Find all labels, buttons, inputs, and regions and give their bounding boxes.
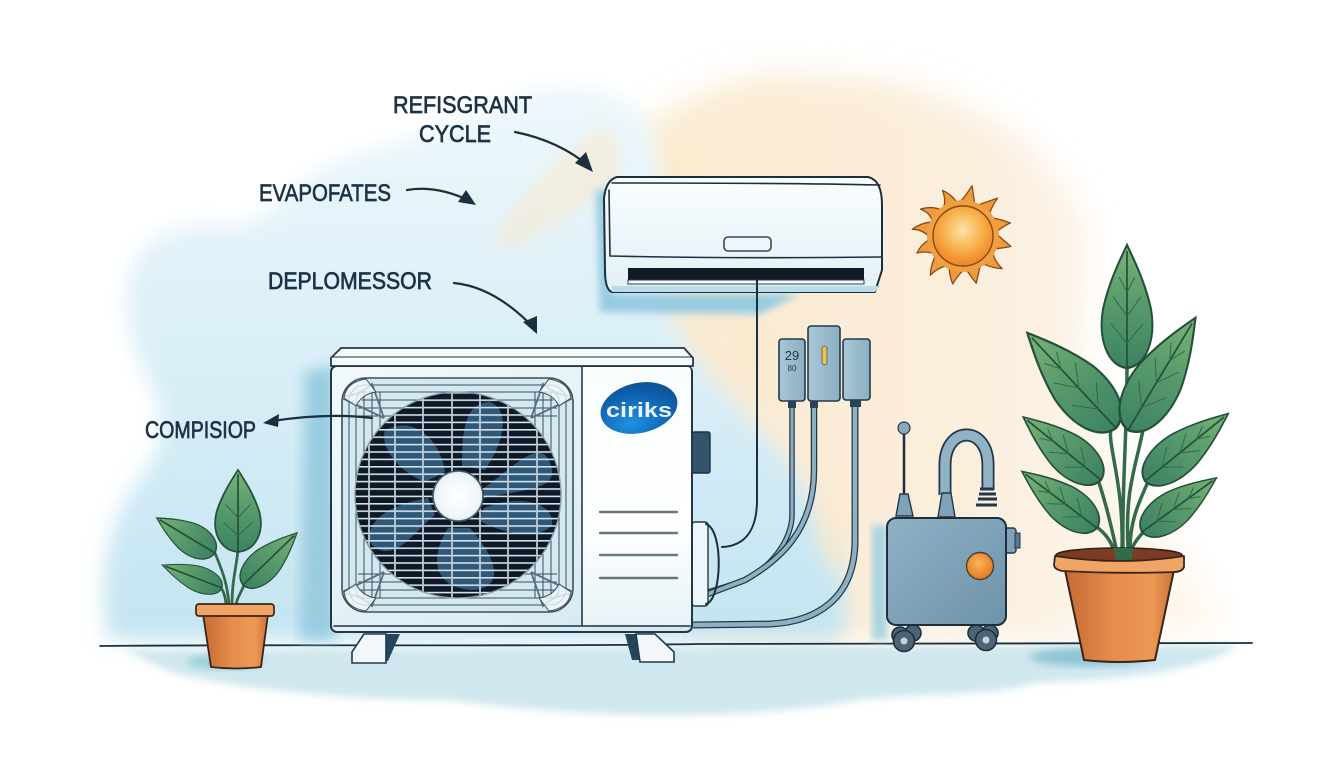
small potted plant — [149, 470, 308, 669]
label: compisiop: COMPISIOP — [145, 417, 256, 444]
label: evaporates: EVAPOFATES — [259, 180, 391, 207]
control box 3 — [843, 339, 870, 400]
background: peach blotches over blue — [495, 125, 844, 575]
label: refrigerant cycle: REFISGRANT — [393, 92, 532, 119]
arrow: evaporates — [407, 189, 476, 205]
arrow: compisiop from fan — [263, 414, 372, 427]
cabinet — [331, 366, 692, 632]
unit wall shadow — [300, 365, 335, 640]
stems — [215, 550, 244, 606]
brand logo — [595, 375, 683, 441]
label: refrigerant cycle — [393, 92, 532, 148]
stems — [1097, 365, 1148, 548]
background: warm peach wash — [640, 75, 1222, 642]
pot body — [203, 614, 268, 668]
label: refrigerant cycle: CYCLE — [419, 121, 491, 148]
sun icon — [912, 185, 1012, 285]
mounting foot left — [352, 634, 400, 663]
control boxes and cables — [693, 326, 870, 625]
control boxes and cables: 80 — [788, 364, 797, 373]
fan hub — [433, 471, 483, 521]
pot body — [1065, 570, 1174, 662]
cable from box 2 — [708, 401, 814, 594]
mounting foot right — [625, 634, 674, 662]
fan disc and blades — [350, 392, 566, 602]
ground line — [100, 643, 1252, 646]
service pump on wheels — [872, 422, 1020, 652]
AC wall shadow — [596, 190, 800, 314]
side connector — [692, 432, 710, 473]
leaves — [149, 470, 308, 600]
side port — [1004, 528, 1016, 553]
pot rim — [1054, 556, 1184, 573]
background: cool blue wash — [103, 87, 846, 640]
outdoor unit — [331, 348, 719, 663]
brand logo: ciriks — [606, 400, 672, 422]
air outlet slot — [628, 268, 864, 280]
control box 1 with display — [779, 339, 805, 401]
pump body — [887, 518, 1006, 625]
pot shadow — [1030, 648, 1150, 666]
indoor air conditioner — [604, 177, 882, 292]
orange knob — [966, 552, 994, 580]
label: deplomessor: DEPLOMESSOR — [268, 268, 432, 295]
arrow: refrigerant to indoor unit — [515, 132, 593, 172]
wheels — [892, 625, 998, 652]
pot rim — [196, 604, 274, 616]
side vent louvres — [600, 512, 677, 578]
fan guard frame — [342, 378, 573, 612]
control box 2 with indicator — [808, 326, 840, 401]
top lid — [331, 348, 693, 366]
AC drain wire — [722, 280, 757, 547]
side service panel — [692, 522, 708, 606]
pot shadow — [187, 655, 263, 669]
hose hook — [938, 435, 997, 517]
leaves — [1008, 245, 1241, 547]
large potted plant — [1008, 245, 1241, 666]
control boxes and cables: 29 — [785, 348, 799, 363]
front panel button — [724, 237, 771, 251]
arrow: deplomessor to outdoor unit — [454, 283, 537, 334]
cable from box 3 — [693, 401, 855, 625]
pot soil — [1056, 548, 1182, 562]
antenna — [896, 422, 913, 516]
ground wash — [125, 645, 1240, 715]
cable from box 1 — [708, 401, 792, 592]
